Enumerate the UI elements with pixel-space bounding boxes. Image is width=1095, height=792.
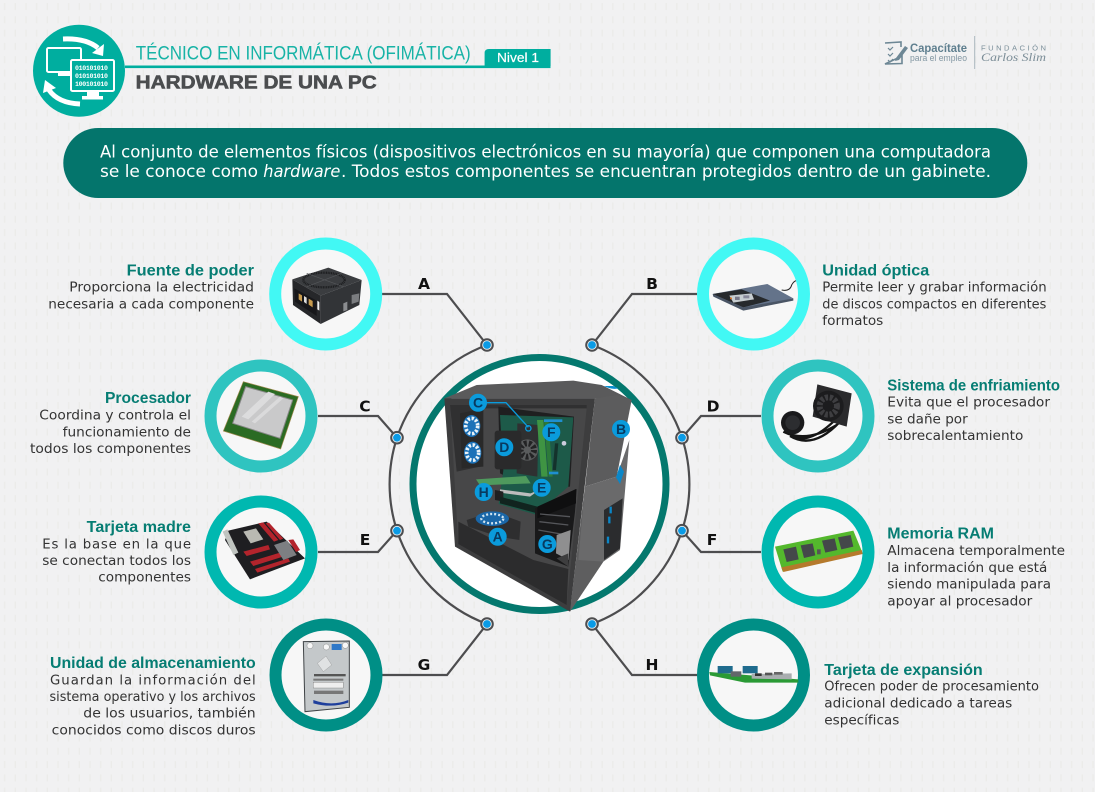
text: Procesador bbox=[30, 390, 191, 457]
text: Unidad óptica bbox=[822, 263, 1047, 329]
case markers A to H bbox=[470, 394, 630, 552]
case markers A to H: C bbox=[473, 394, 483, 410]
connector letters bbox=[359, 275, 720, 674]
connector letters: B bbox=[646, 275, 658, 293]
icon: computers with sync arrows: 100101010 bbox=[75, 81, 108, 88]
text: Procesador: Procesador bbox=[105, 390, 191, 407]
central ring bbox=[413, 358, 666, 610]
icon: computers with sync arrows: 010101010 bbox=[75, 73, 108, 80]
icon: expansion card bbox=[709, 666, 798, 683]
case markers A to H: F bbox=[547, 424, 556, 440]
logo: Capacítate para el empleo / Fundación Carlos Slim: FUNDACIÓN bbox=[981, 44, 1046, 52]
logo: Capacítate para el empleo / Fundación Carlos Slim: Capacítate bbox=[910, 41, 967, 55]
level tab: Nivel 1 bbox=[497, 50, 539, 65]
icon: computers with sync arrows: 010101010 bbox=[75, 65, 108, 72]
intro banner: se le conoce como bbox=[100, 161, 258, 181]
text: Memoria RAM: la información que está bbox=[887, 560, 1047, 576]
panel: motherboard bbox=[210, 502, 312, 602]
course title: TÉCNICO EN INFORMÁTICA (OFIMÁTICA) bbox=[136, 43, 471, 64]
panel: optical drive bbox=[703, 244, 804, 344]
text: Unidad de almacenamiento: conocidos como discos duros bbox=[52, 723, 256, 738]
icon: computers with sync arrows bbox=[33, 25, 125, 117]
text: Tarjeta madre: Tarjeta madre bbox=[87, 519, 191, 536]
panel: power supply bbox=[275, 244, 376, 344]
icon: liquid cooler bbox=[781, 384, 852, 441]
icon: motherboard bbox=[223, 522, 305, 579]
panel: RAM bbox=[768, 502, 868, 602]
text: Tarjeta madre: se conectan todos los bbox=[42, 554, 191, 569]
ring H bbox=[703, 624, 804, 726]
connector nodes bbox=[391, 339, 688, 630]
text: Tarjeta madre: componentes bbox=[98, 571, 191, 586]
ring B bbox=[703, 244, 804, 344]
text: Unidad de almacenamiento: Unidad de almacenamiento bbox=[50, 655, 256, 672]
text: Memoria RAM: Almacena temporalmente bbox=[887, 544, 1065, 559]
panel: storage bbox=[276, 624, 376, 726]
ring E bbox=[210, 502, 312, 602]
text: Tarjeta de expansión: específicas bbox=[824, 712, 899, 728]
text: Unidad de almacenamiento: Guardan la información del bbox=[50, 672, 256, 688]
text: Procesador: Coordina y controla el bbox=[39, 409, 191, 424]
panel: expansion card bbox=[703, 624, 804, 726]
text: Tarjeta de expansión: adicional dedicado a tareas bbox=[824, 696, 1012, 712]
connector letters: G bbox=[418, 656, 430, 674]
text: Memoria RAM: Memoria RAM bbox=[887, 526, 994, 543]
text: Unidad de almacenamiento: de los usuarios, también bbox=[83, 706, 256, 722]
text: Memoria RAM bbox=[887, 526, 1065, 609]
connector letters: H bbox=[646, 656, 658, 674]
text: Tarjeta madre bbox=[42, 519, 191, 586]
computer case bbox=[444, 381, 632, 612]
text: Fuente de poder bbox=[48, 263, 254, 312]
text: Fuente de poder: Fuente de poder bbox=[127, 263, 254, 280]
text: Procesador: todos los componentes bbox=[30, 442, 191, 457]
text: Fuente de poder: necesaria a cada componente bbox=[48, 297, 254, 312]
text: Fuente de poder: Proporciona la electricidad bbox=[69, 281, 254, 296]
text: Sistema de enfriamiento: sobrecalentamiento bbox=[887, 429, 1023, 444]
text: Sistema de enfriamiento: Evita que el procesador bbox=[887, 396, 1051, 411]
text: Memoria RAM: apoyar al procesador bbox=[887, 594, 1033, 609]
ring F bbox=[768, 502, 868, 602]
text: Sistema de enfriamiento bbox=[887, 378, 1060, 444]
connector letters: A bbox=[418, 275, 430, 293]
icon: processor bbox=[223, 382, 298, 449]
intro banner: Al conjunto de elementos físicos (dispositivos electrónicos en su mayoría) que componen una computadora bbox=[100, 141, 991, 161]
case markers A to H: D bbox=[499, 439, 509, 455]
ring C bbox=[210, 366, 312, 466]
connector letters: D bbox=[707, 398, 720, 416]
case markers A to H: B bbox=[616, 421, 626, 437]
text: Tarjeta de expansión: Tarjeta de expansión bbox=[824, 662, 983, 679]
level tab bbox=[125, 49, 551, 68]
logo: Capacítate para el empleo / Fundación Carlos Slim bbox=[885, 36, 1046, 69]
icon: optical drive bbox=[713, 281, 796, 311]
intro banner: . Todos estos componentes se encuentran protegidos dentro de un gabinete. bbox=[341, 161, 991, 181]
icon: power supply bbox=[292, 268, 362, 324]
case markers A to H: E bbox=[537, 480, 546, 496]
case markers A to H: H bbox=[479, 484, 489, 500]
text: Sistema de enfriamiento: Sistema de enfriamiento bbox=[887, 378, 1060, 395]
logo: Capacítate para el empleo / Fundación Carlos Slim: Carlos Slim bbox=[981, 50, 1046, 64]
panel: processor bbox=[210, 366, 312, 466]
connector letters: C bbox=[359, 398, 371, 416]
ring G bbox=[276, 624, 376, 726]
intro banner: hardware bbox=[263, 161, 340, 181]
connector letters: F bbox=[707, 531, 717, 549]
text: Unidad óptica: formatos bbox=[822, 314, 883, 329]
ring D bbox=[768, 366, 868, 466]
text: Unidad óptica: Unidad óptica bbox=[822, 263, 930, 280]
text: Sistema de enfriamiento: se dañe por bbox=[887, 412, 968, 428]
text: Unidad óptica: Permite leer y grabar información bbox=[822, 280, 1047, 296]
logo: Capacítate para el empleo / Fundación Carlos Slim: para el empleo bbox=[910, 53, 967, 64]
text: Memoria RAM: siendo manipulada para bbox=[887, 578, 1051, 593]
icon: hard drive bbox=[303, 641, 349, 712]
case markers A to H: A bbox=[493, 528, 503, 544]
connector letters: E bbox=[360, 531, 370, 549]
text: Tarjeta madre: Es la base en la que bbox=[42, 537, 191, 552]
heading: HARDWARE DE UNA PC bbox=[136, 71, 377, 92]
text: Tarjeta de expansión bbox=[824, 662, 1039, 728]
icon: RAM module bbox=[775, 531, 863, 572]
intro banner bbox=[63, 128, 1027, 198]
text: Unidad de almacenamiento: sistema operativo y los archivos bbox=[50, 690, 256, 705]
text: Unidad de almacenamiento bbox=[50, 655, 256, 738]
connector network bbox=[318, 294, 761, 675]
case markers A to H: G bbox=[542, 536, 553, 552]
text: Tarjeta de expansión: Ofrecen poder de procesamiento bbox=[824, 680, 1039, 695]
text: Procesador: funcionamiento de bbox=[63, 425, 191, 440]
panel: cooling system bbox=[768, 366, 868, 466]
ring A bbox=[275, 244, 376, 344]
text: Unidad óptica: de discos compactos en diferentes bbox=[822, 297, 1046, 312]
